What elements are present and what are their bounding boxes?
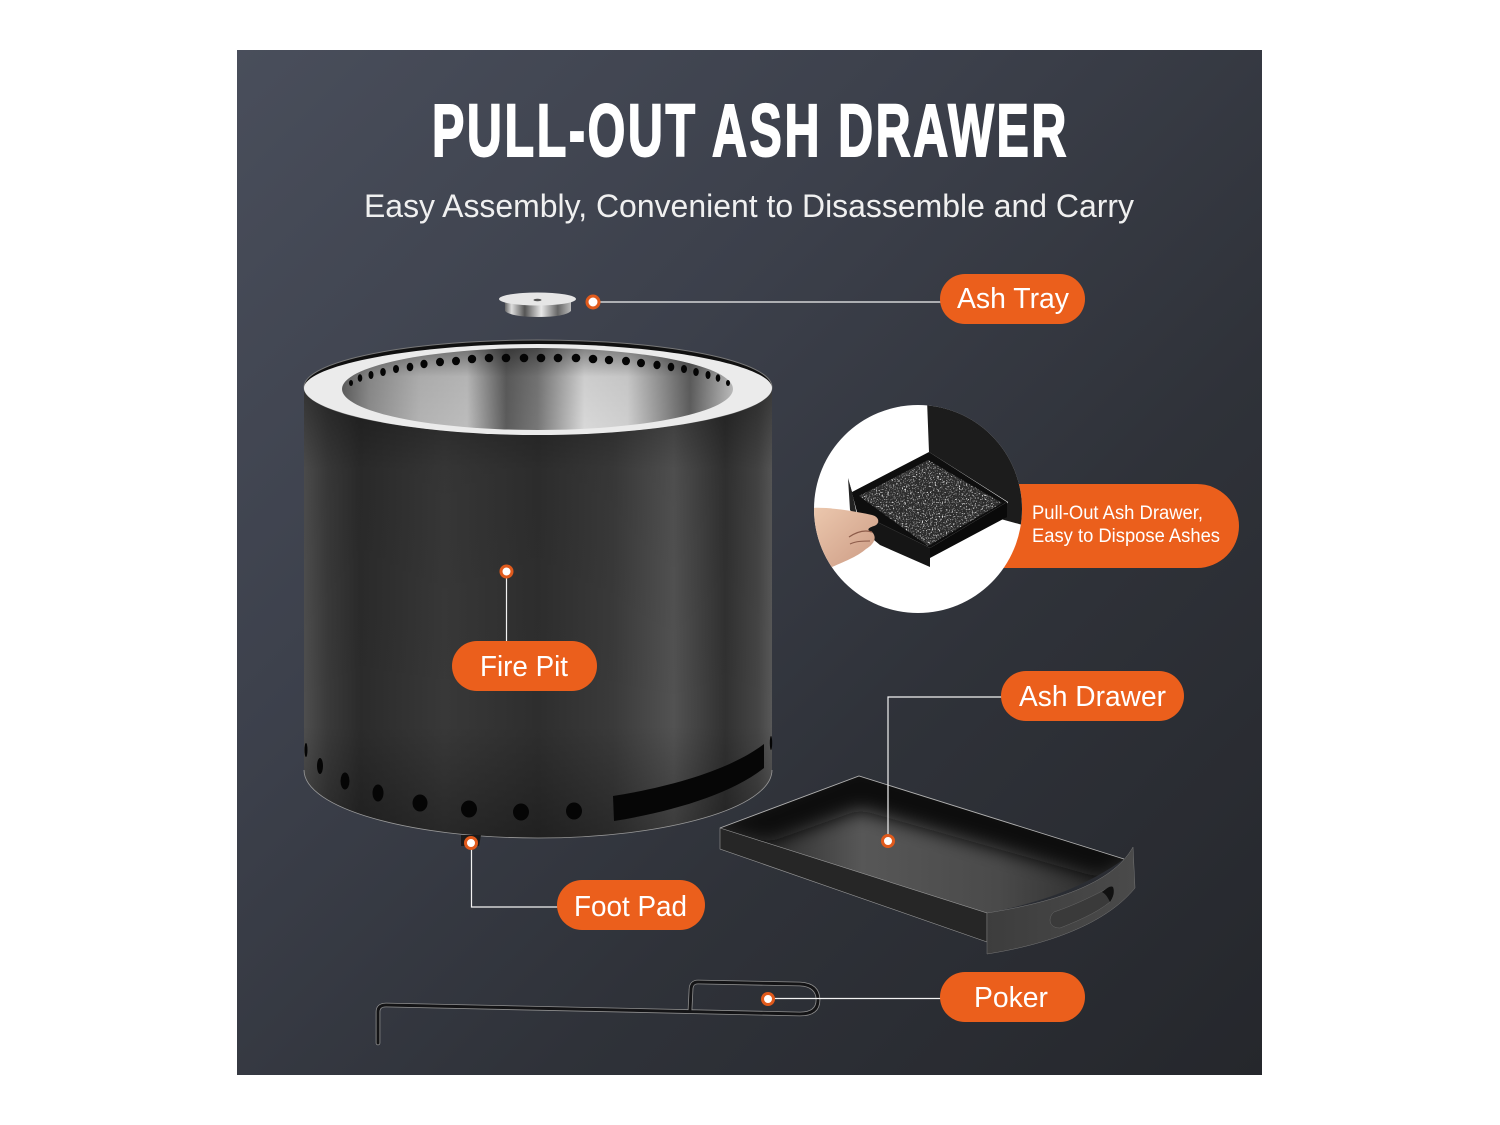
drawer floor and walls bbox=[720, 776, 1124, 913]
fire pit top rim bbox=[304, 340, 772, 435]
callout pill: pull-out ash drawer: Pull-Out Ash Drawer, bbox=[1032, 503, 1203, 524]
callout: poker: Poker bbox=[974, 982, 1048, 1014]
fire pit bottom edge bbox=[304, 770, 772, 838]
callout: fire pit: Fire Pit bbox=[480, 651, 568, 683]
callout: foot pad: Foot Pad bbox=[574, 891, 687, 923]
inset circle: pull-out ash drawer detail bbox=[812, 400, 1239, 613]
subtitle: Easy Assembly, Convenient to Disassemble and Carry bbox=[364, 188, 1134, 224]
hand bbox=[812, 508, 878, 567]
inset drawer bbox=[848, 452, 1007, 548]
callout: ash tray bbox=[587, 274, 1085, 324]
illustration: ash drawer bbox=[720, 776, 1136, 954]
title: PULL-OUT ASH DRAWER bbox=[432, 89, 1069, 172]
fire pit body bbox=[304, 388, 772, 838]
pit wall in inset bbox=[927, 406, 1022, 524]
icon: poker bbox=[378, 982, 818, 1043]
drawer slot bbox=[613, 744, 764, 821]
drawer handle slot bbox=[1050, 887, 1113, 928]
icon: ash tray lid bbox=[499, 292, 576, 317]
callout: poker bbox=[762, 972, 1085, 1022]
illustration: fire pit bbox=[304, 340, 772, 846]
ash bed bbox=[859, 460, 1002, 546]
inset drawer front bbox=[857, 512, 930, 567]
drawer rim highlight bbox=[720, 776, 1124, 859]
foot pad bbox=[461, 835, 481, 846]
lower air holes bbox=[304, 736, 772, 820]
callout: ash drawer: Ash Drawer bbox=[1019, 681, 1166, 713]
callout: ash tray: Ash Tray bbox=[957, 283, 1069, 315]
callout: fire pit bbox=[452, 566, 597, 691]
callout pill: pull-out ash drawer: Easy to Dispose Ashes bbox=[1032, 526, 1220, 547]
panel: dark background bbox=[237, 50, 1262, 1075]
callout pill: pull-out ash drawer bbox=[960, 484, 1239, 568]
drawer curved front handle panel bbox=[987, 847, 1135, 954]
callout: foot pad bbox=[466, 838, 705, 930]
air holes around the inner rim bbox=[349, 354, 730, 386]
callout: ash drawer bbox=[882, 671, 1184, 846]
drawer side wall bbox=[720, 828, 987, 942]
